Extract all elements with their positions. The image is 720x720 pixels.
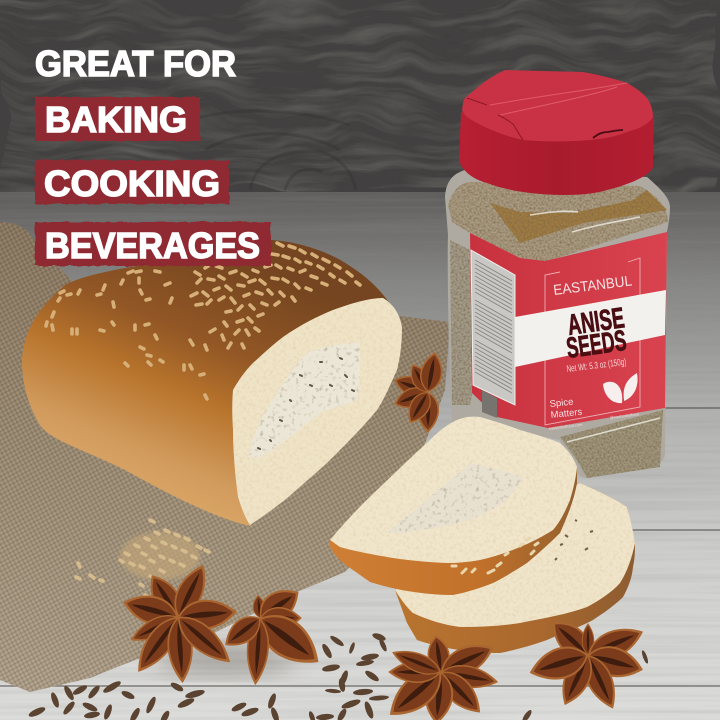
bread loaf — [22, 240, 402, 526]
front bread slice — [330, 417, 577, 595]
tag: baking: BAKING — [45, 99, 187, 140]
background: dark wood wall — [0, 0, 720, 193]
web and social handles: @eastanbulfood — [610, 411, 639, 420]
loaf crumb face — [232, 298, 402, 525]
nutrition facts panel — [471, 250, 515, 405]
product jar: Eastanbul Anise Seeds — [445, 70, 670, 478]
brand name: EASTANBUL — [553, 273, 633, 299]
star anise: first — [119, 559, 238, 684]
star anise: right — [525, 612, 648, 714]
sesame seeds on loaf: dense cluster and sparse left — [46, 243, 360, 399]
tag: beverages: BEVERAGES — [45, 225, 260, 266]
loaf filling swirl — [248, 342, 360, 457]
burlap cloth — [0, 222, 450, 692]
tagline: Matters — [550, 407, 583, 421]
product name: ANISE — [566, 302, 626, 342]
sesame seed pile on burlap — [76, 520, 209, 597]
star anise: centre — [380, 634, 500, 720]
background: grey wooden table — [0, 192, 720, 720]
heading: great for: GREAT FOR — [35, 43, 236, 84]
tagline: Spice — [549, 397, 574, 410]
white band — [515, 290, 666, 367]
star anise cluster: left — [119, 559, 330, 686]
scattered anise seeds — [27, 632, 649, 720]
star anise: second — [218, 580, 330, 686]
web and social handles: eastanbulfood.com — [549, 422, 583, 431]
leaf icon — [603, 373, 638, 403]
tag: cooking: COOKING — [44, 163, 220, 204]
jar glass and seeds — [445, 170, 670, 478]
back bread slice — [395, 483, 635, 653]
label frame — [545, 258, 640, 425]
jar red cap — [459, 70, 654, 195]
QR code — [482, 390, 497, 418]
star anise behind jar — [391, 350, 446, 433]
web and social handles — [549, 411, 639, 431]
product name: SEEDS — [565, 325, 628, 365]
loaf crust — [22, 240, 402, 526]
jar red label — [470, 232, 667, 431]
filling seed flecks — [258, 358, 354, 449]
net weight: Net Wt: 5.3 oz (150g) — [566, 357, 627, 375]
product name — [565, 302, 628, 365]
tagline — [549, 397, 583, 421]
